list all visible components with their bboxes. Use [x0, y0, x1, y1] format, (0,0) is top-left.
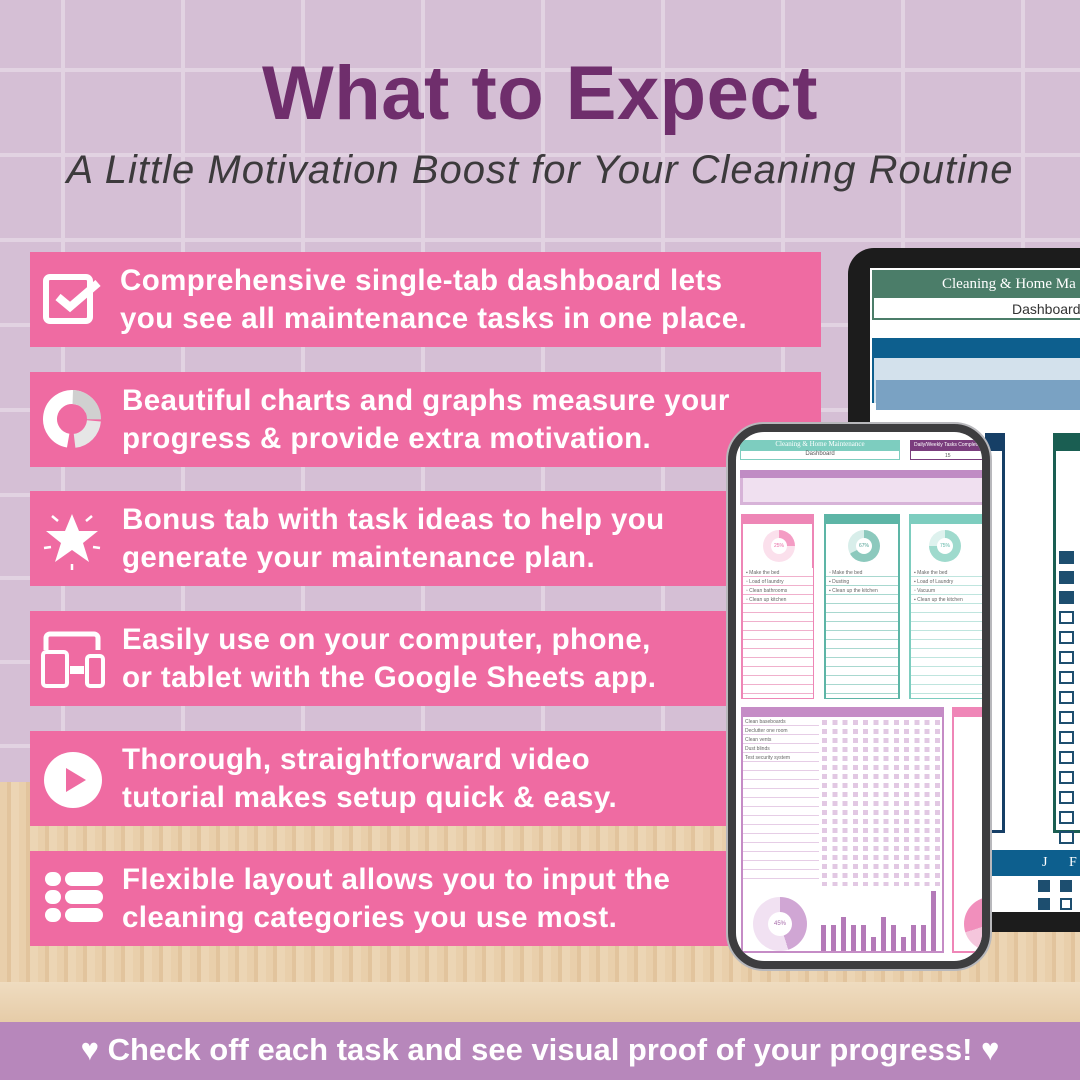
phone	[726, 422, 992, 971]
day panels: ▪ Make the bed	[746, 570, 779, 576]
tablet header: Cleaning & Home Ma	[942, 276, 1076, 292]
bar 6: Flexible layout allows you to input the	[122, 863, 670, 896]
title: What to Expect	[262, 51, 818, 136]
monthly tasks panel: Test security system	[745, 755, 790, 761]
bar 3: Bonus tab with task ideas to help you	[122, 503, 665, 536]
phone: ▪ Clean up the kitchen	[829, 588, 878, 594]
phone header: Cleaning & Home Maintenance	[775, 440, 865, 448]
phone: Dashboard	[805, 451, 835, 457]
bar 3: generate your maintenance plan.	[122, 541, 595, 574]
bar 2: Beautiful charts and graphs measure your	[122, 384, 730, 417]
bar 5	[30, 731, 821, 826]
icon: devices	[41, 632, 105, 688]
day panels: ▫ Clean up kitchen	[746, 597, 786, 603]
bar 4: Easily use on your computer, phone,	[122, 623, 651, 656]
bar 1	[30, 252, 821, 347]
icon: play button	[44, 752, 102, 808]
bar 3	[30, 491, 821, 586]
icon: star	[44, 514, 100, 570]
bar 1: Comprehensive single-tab dashboard lets	[120, 264, 722, 297]
phone: ▪ Load of Laundry	[914, 579, 953, 585]
bar 2: progress & provide extra motivation.	[122, 422, 651, 455]
icon: checkbox	[43, 274, 100, 324]
tablet checkboxes	[1059, 551, 1074, 844]
bar 5: Thorough, straightforward video	[122, 743, 590, 776]
monthly tasks panel: Clean baseboards	[745, 719, 786, 725]
wood table	[0, 782, 1080, 1022]
monthly tasks panel: 45%	[774, 921, 786, 927]
monthly tasks panel	[741, 707, 944, 953]
subtitle: A Little Motivation Boost for Your Cleaning Routine	[66, 148, 1014, 192]
day panels: 25%	[774, 543, 784, 549]
day panels: ▫ Load of laundry	[746, 579, 784, 585]
bar 6	[30, 851, 821, 946]
day panels	[741, 514, 814, 699]
bar 6: cleaning categories you use most.	[122, 901, 617, 934]
phone header	[740, 440, 900, 450]
bar 4	[30, 611, 821, 706]
bottom banner: ♥ Check off each task and see visual proof of your progress! ♥	[81, 1032, 999, 1067]
bar 2	[30, 372, 821, 467]
tablet: Dashboard	[1012, 301, 1080, 317]
tablet header	[872, 270, 1080, 296]
monthly tasks panel: Declutter one room	[745, 728, 788, 734]
monthly tasks panel: Clean vents	[745, 737, 771, 743]
icon: list	[45, 872, 103, 922]
phone: ▫ Make the bed	[829, 570, 862, 576]
phone: Daily/Weekly Tasks Complete	[914, 442, 980, 448]
icon: donut chart	[42, 390, 101, 448]
bottom banner	[0, 1022, 1080, 1080]
bar 5: tutorial makes setup quick & easy.	[122, 781, 617, 814]
day panels: ▫ Clean bathrooms	[746, 588, 787, 594]
tablet: J F	[1042, 855, 1077, 870]
phone: ▪ Make the bed	[914, 570, 947, 576]
phone: ▪ Dusting	[829, 579, 849, 585]
monthly tasks panel: Dust blinds	[745, 746, 770, 752]
phone: 15	[945, 453, 951, 459]
phone: ▫ Vacuum	[914, 588, 935, 594]
phone: 75%	[940, 543, 950, 549]
bar 1: you see all maintenance tasks in one place.	[120, 302, 747, 335]
phone: 67%	[859, 543, 869, 549]
tablet	[848, 248, 1080, 932]
bar 4: or tablet with the Google Sheets app.	[122, 661, 656, 694]
phone: ▪ Clean up the kitchen	[914, 597, 963, 603]
